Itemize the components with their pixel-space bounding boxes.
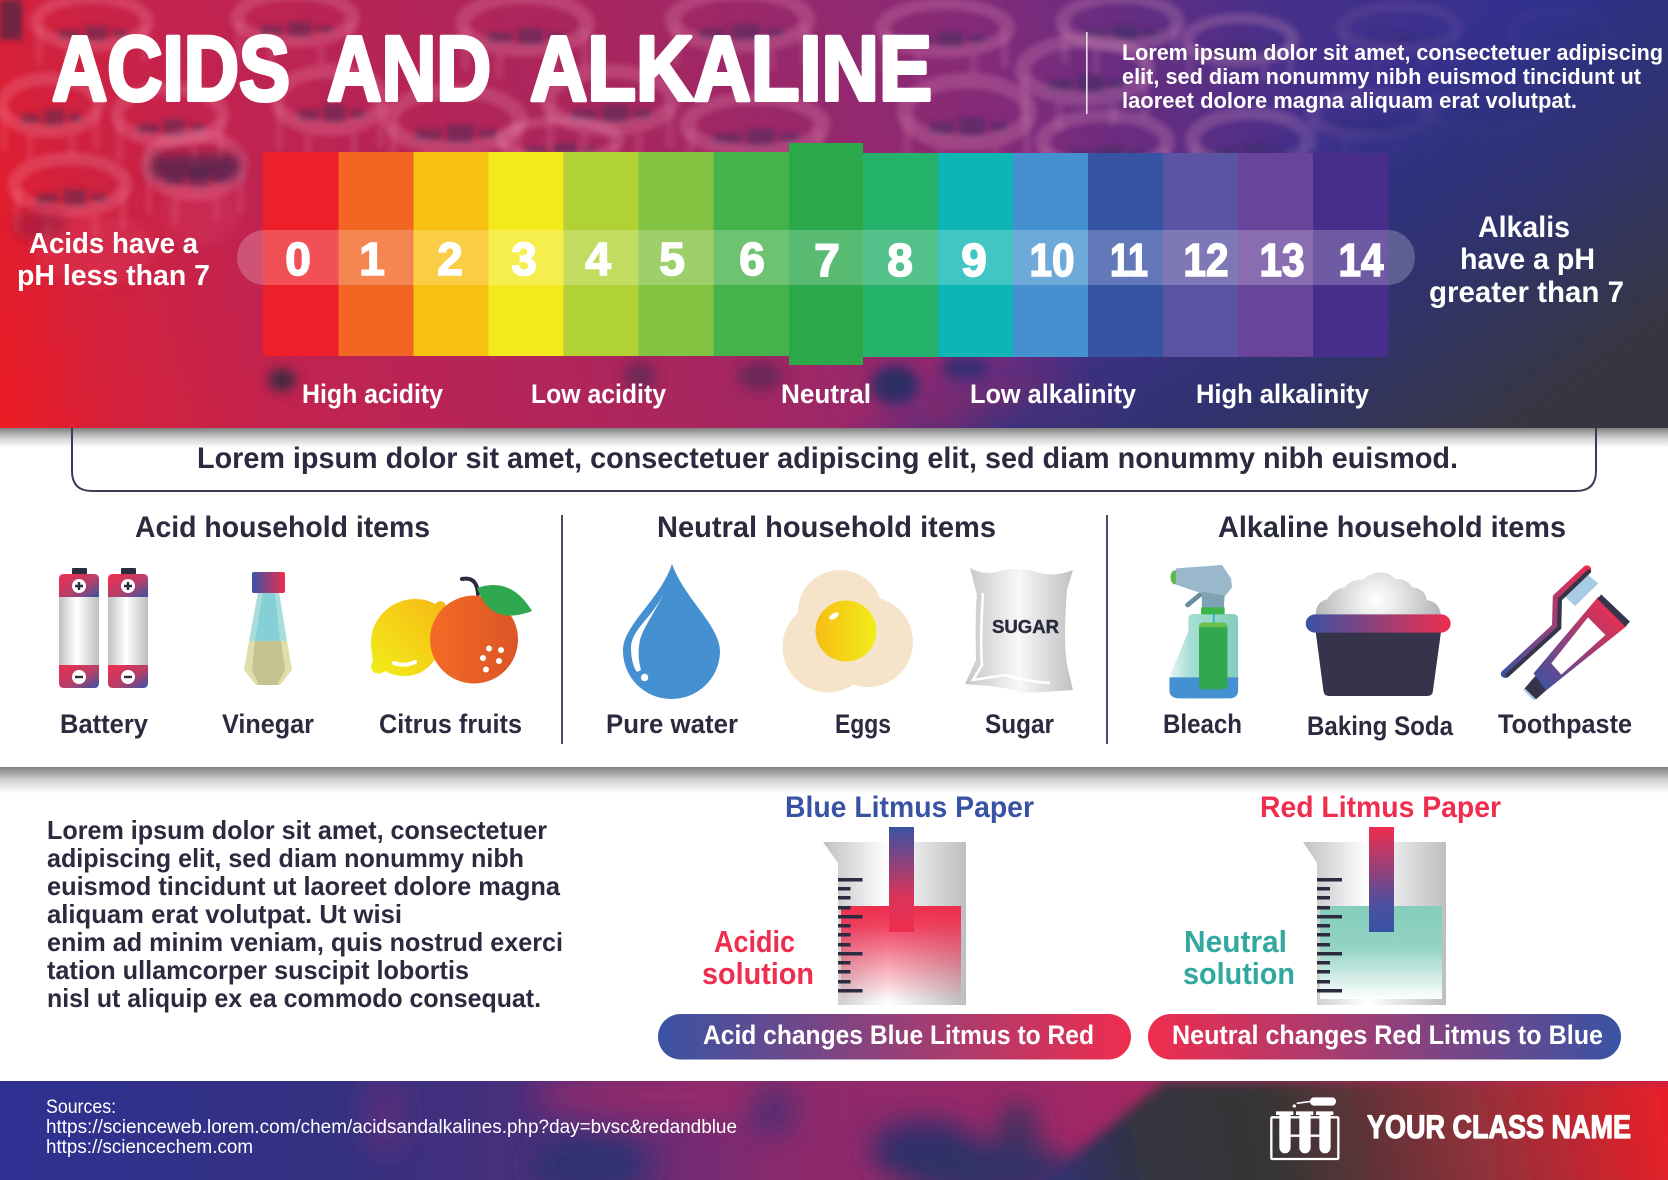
- body paragraph: tation ullamcorper suscipit lobortis: [47, 955, 469, 985]
- pill: acid result: [658, 1014, 1131, 1060]
- sources text: [46, 1097, 737, 1158]
- beaker with acidic solution: [823, 827, 966, 1005]
- icon: baking soda bowl: [1306, 573, 1451, 696]
- header divider: [1086, 32, 1088, 114]
- pH numbers: [285, 233, 1384, 286]
- heading: neutral items: Neutral household items: [657, 511, 996, 544]
- pH numbers: 6: [739, 233, 765, 285]
- intro text: elit, sed diam nonummy nibh euismod tincidunt ut: [1122, 64, 1642, 89]
- scale category labels: Low acidity: [531, 379, 666, 409]
- pill: acid result: Acid changes Blue Litmus to Red: [703, 1020, 1094, 1050]
- shadow band above lower section: [0, 767, 1668, 793]
- caption box: [72, 428, 1596, 491]
- label: bleach: Bleach: [1163, 709, 1242, 739]
- heading: blue litmus paper: Blue Litmus Paper: [785, 791, 1034, 824]
- intro text: [1122, 40, 1663, 113]
- icon: citrus fruits: [371, 579, 532, 684]
- sources text: https://sciencechem.com: [46, 1137, 253, 1158]
- scale category labels: High alkalinity: [1196, 379, 1369, 409]
- alkalis side note: greater than 7: [1429, 276, 1624, 309]
- scale category labels: [302, 379, 1369, 409]
- pH numbers: 11: [1110, 234, 1148, 286]
- intro text: laoreet dolore magna aliquam erat volutpat.: [1122, 88, 1577, 113]
- label: acidic solution: solution: [702, 956, 814, 991]
- red litmus strip: [1369, 827, 1394, 932]
- label: neutral solution: [1183, 924, 1295, 991]
- panel: alkaline household items: [1163, 511, 1632, 741]
- title: AND: [327, 18, 491, 120]
- icon: battery: [59, 568, 148, 688]
- pH numbers: 8: [887, 234, 913, 286]
- body paragraph: Lorem ipsum dolor sit amet, consectetuer: [47, 815, 547, 845]
- pH scale chart: [237, 143, 1415, 365]
- sources text: https://scienceweb.lorem.com/chem/acidsandalkalines.php?day=bvsc&redandblue: [46, 1117, 737, 1138]
- blue litmus strip: [889, 827, 914, 932]
- scale category labels: Low alkalinity: [970, 379, 1136, 409]
- icon: sugar bag: [965, 568, 1073, 693]
- pH numbers: 14: [1338, 234, 1384, 286]
- body paragraph: [47, 815, 563, 1013]
- panel: acid household items: [59, 511, 532, 739]
- pH numbers: 3: [511, 233, 537, 285]
- panel: red litmus experiment: [1148, 791, 1621, 1060]
- icon: test tube rack logo: [1271, 1097, 1338, 1159]
- footer background: [0, 1073, 1668, 1180]
- title: ACIDS: [52, 18, 290, 120]
- caption text: Lorem ipsum dolor sit amet, consectetuer adipiscing elit, sed diam nonummy nibh euismod.: [197, 442, 1458, 475]
- body paragraph: nisl ut aliquip ex ea commodo consequat.: [47, 983, 541, 1013]
- acids side note: [17, 228, 210, 292]
- body paragraph: enim ad minim veniam, quis nostrud exerci: [47, 927, 563, 957]
- pH numbers: 2: [437, 233, 463, 285]
- alkalis side note: [1429, 211, 1624, 309]
- icon: fried egg: [782, 570, 913, 692]
- heading: acid items: Acid household items: [135, 511, 430, 544]
- icon: spray bleach bottle: [1169, 565, 1238, 698]
- icon: water drop: [623, 564, 720, 699]
- panel: blue litmus experiment: [658, 791, 1131, 1060]
- pH numbers: 7: [814, 234, 840, 286]
- heading: red litmus paper: Red Litmus Paper: [1260, 791, 1501, 824]
- heading: alkaline items: Alkaline household items: [1218, 511, 1566, 544]
- pill: neutral result: [1148, 1014, 1621, 1060]
- label: battery: Battery: [60, 709, 148, 739]
- label: eggs: Eggs: [835, 709, 891, 739]
- colour bars 0 to 14: [263, 143, 1388, 365]
- pH numbers: 4: [585, 233, 611, 285]
- body paragraph: euismod tincidunt ut laoreet dolore magna: [47, 871, 561, 901]
- label: neutral solution: solution: [1183, 956, 1295, 991]
- pH numbers: 12: [1184, 234, 1228, 286]
- acids side note: pH less than 7: [17, 260, 210, 292]
- divider left: [561, 515, 563, 744]
- pH numbers: 13: [1260, 234, 1304, 286]
- label: pure water: Pure water: [606, 709, 738, 739]
- header background: test tube photo with gradient: [0, 0, 1668, 435]
- intro text: Lorem ipsum dolor sit amet, consectetuer adipiscing: [1122, 40, 1663, 65]
- body paragraph: aliquam erat volutpat. Ut wisi: [47, 899, 402, 929]
- label: baking soda: Baking Soda: [1307, 711, 1454, 741]
- shadow below header: [0, 428, 1668, 448]
- acids side note: Acids have a: [29, 228, 199, 260]
- translucent number band: [237, 230, 1415, 285]
- label: acidic solution: [702, 924, 814, 991]
- label: vinegar: Vinegar: [222, 709, 314, 739]
- pH numbers: 1: [359, 233, 385, 285]
- alkalis side note: Alkalis: [1478, 211, 1570, 244]
- label: neutral solution: Neutral: [1184, 924, 1287, 959]
- label: acidic solution: Acidic: [714, 924, 795, 959]
- icon: vinegar bottle: [244, 572, 292, 685]
- icon: toothbrush and toothpaste: [1505, 569, 1630, 700]
- scale category labels: Neutral: [781, 379, 871, 409]
- divider right: [1106, 515, 1108, 744]
- alkalis side note: have a pH: [1460, 243, 1595, 276]
- pH numbers: 9: [961, 234, 987, 286]
- beaker with neutral solution: [1303, 827, 1446, 1005]
- scale category labels: High acidity: [302, 379, 443, 409]
- sugar label: SUGAR: [992, 617, 1059, 637]
- pH numbers: 10: [1030, 234, 1074, 286]
- title: ALKALINE: [530, 18, 932, 120]
- label: toothpaste: Toothpaste: [1498, 709, 1632, 739]
- label: sugar: Sugar: [985, 709, 1054, 739]
- sources text: Sources:: [46, 1097, 116, 1118]
- label: citrus fruits: Citrus fruits: [379, 709, 522, 739]
- pH numbers: 5: [659, 233, 685, 285]
- body paragraph: adipiscing elit, sed diam nonummy nibh: [47, 843, 524, 873]
- pH numbers: 0: [285, 233, 311, 285]
- title: [52, 18, 932, 120]
- pill: neutral result: Neutral changes Red Litmus to Blue: [1172, 1020, 1603, 1050]
- panel: neutral household items: [606, 511, 1073, 739]
